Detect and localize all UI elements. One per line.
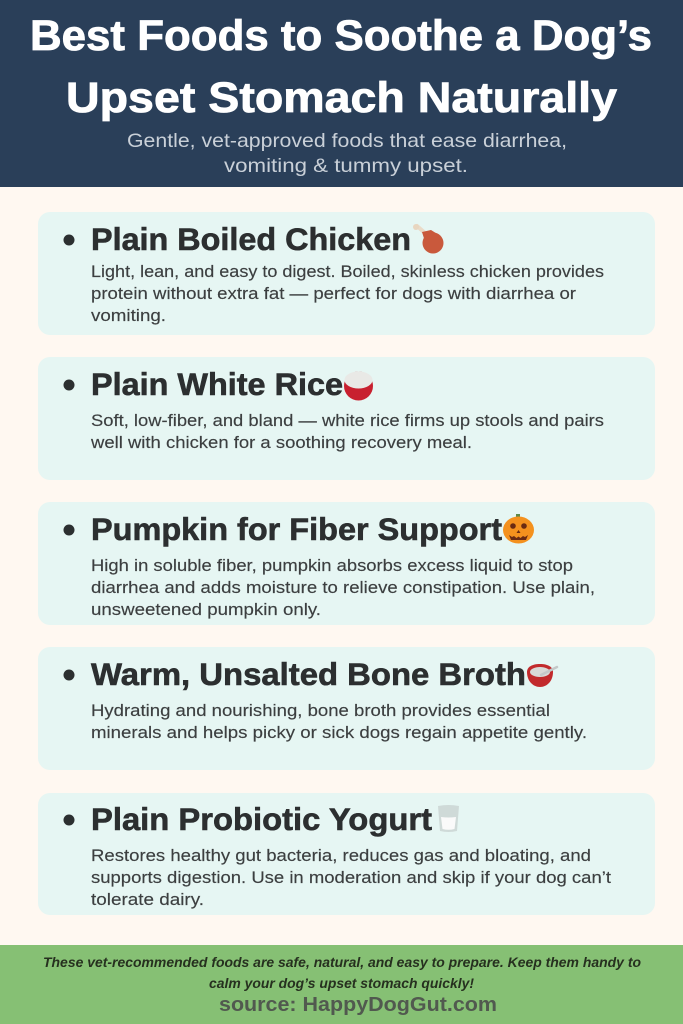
body text (91, 702, 587, 742)
panel: plain probiotic yogurt (38, 793, 655, 915)
footer band (0, 945, 683, 1024)
body text: supports digestion. Use in moderation and skip if your dog can’t (91, 869, 611, 887)
heading: Plain White Rice (91, 366, 343, 402)
header banner (0, 0, 683, 187)
heading: Warm, Unsalted Bone Broth (91, 656, 526, 692)
body text: Soft, low-fiber, and bland — white rice firms up stools and pairs (91, 412, 604, 430)
bullet (64, 670, 74, 680)
body text: unsweetened pumpkin only. (91, 601, 321, 619)
body text (91, 557, 595, 619)
subtitle: Gentle, vet-approved foods that ease diarrhea, (127, 130, 567, 152)
footer note: These vet-recommended foods are safe, natural, and easy to prepare. Keep them handy to (43, 955, 641, 970)
icon: glass of milk (438, 805, 459, 832)
footer note: calm your dog’s upset stomach quickly! (209, 976, 475, 991)
title: Best Foods to Soothe a Dog’s (30, 12, 652, 60)
heading: Pumpkin for Fiber Support (91, 511, 503, 547)
body text: High in soluble fiber, pumpkin absorbs excess liquid to stop (91, 557, 573, 575)
heading: Plain Boiled Chicken (91, 221, 411, 257)
bullet (64, 814, 74, 826)
panel: plain white rice (38, 357, 655, 480)
icon: soup bowl (527, 664, 557, 687)
body text: Light, lean, and easy to digest. Boiled, skinless chicken provides (91, 263, 604, 281)
source line: source: HappyDogGut.com (219, 993, 497, 1016)
body text (90, 412, 604, 452)
body text: tolerate dairy. (91, 891, 204, 909)
icon: chicken drumstick (413, 224, 444, 254)
subtitle: vomiting & tummy upset. (224, 155, 468, 177)
body text: protein without extra fat — perfect for dogs with diarrhea or (91, 285, 577, 303)
body text: well with chicken for a soothing recovery meal. (90, 434, 472, 452)
subtitle (127, 130, 567, 177)
body text: minerals and helps picky or sick dogs regain appetite gently. (91, 724, 587, 742)
body text: diarrhea and adds moisture to relieve constipation. Use plain, (91, 579, 595, 597)
title: Upset Stomach Naturally (66, 74, 617, 122)
panel: warm unsalted bone broth (38, 647, 655, 770)
bullet (64, 380, 74, 390)
bullet (64, 234, 74, 246)
bullet (64, 524, 74, 536)
body text (91, 847, 611, 909)
title (30, 12, 652, 122)
panel: plain boiled chicken (38, 212, 655, 335)
body text: Hydrating and nourishing, bone broth provides essential (91, 702, 550, 720)
panel: pumpkin for fiber support (38, 502, 655, 625)
body text: vomiting. (91, 307, 166, 325)
footer note (43, 955, 641, 991)
body text (91, 263, 604, 325)
body text: Restores healthy gut bacteria, reduces gas and bloating, and (91, 847, 591, 865)
heading: Plain Probiotic Yogurt (91, 801, 433, 837)
icon: jack-o-lantern (503, 514, 534, 544)
icon: rice bowl (344, 372, 373, 400)
